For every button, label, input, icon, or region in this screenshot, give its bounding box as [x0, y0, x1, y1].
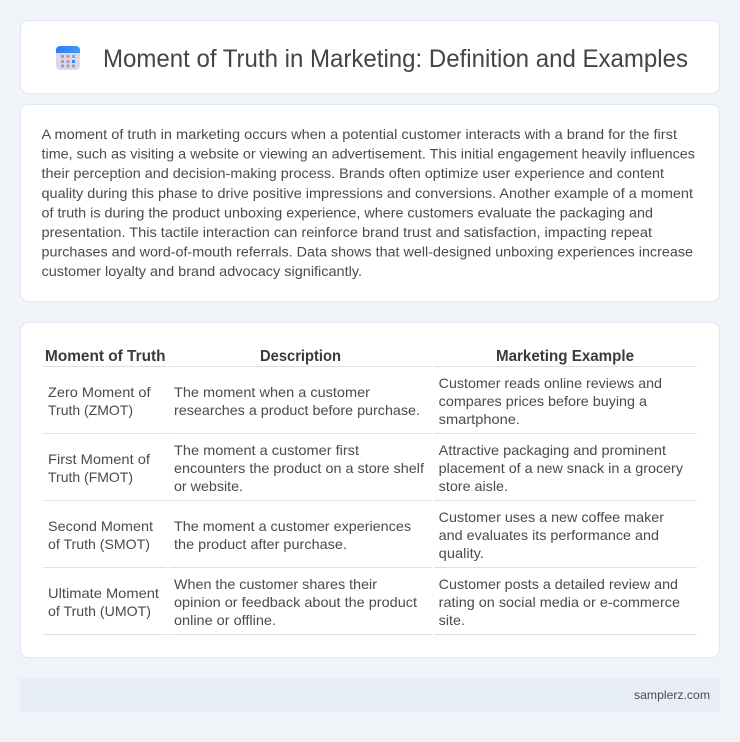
table row: ZMOT: Customer reads online reviews and — [439, 375, 662, 391]
table row: UMOT: online or offline. — [174, 612, 276, 628]
table row: FMOT: Attractive packaging and prominent — [439, 442, 666, 458]
table row: SMOT — [48, 509, 664, 561]
table header row — [45, 348, 634, 365]
table row: FMOT: Truth (FMOT) — [48, 469, 133, 485]
table header row: Description — [260, 348, 341, 365]
table row: FMOT — [48, 442, 683, 494]
table row: ZMOT: smartphone. — [439, 411, 520, 427]
text block: introduction paragraph: A moment of truth in marketing occurs when a potential customer interacts with a brand for the first — [42, 126, 677, 142]
table row: ZMOT — [48, 375, 662, 427]
table row: FMOT: First Moment of — [48, 451, 150, 467]
footer source text: samplerz.com — [634, 688, 710, 702]
table row: ZMOT: researches a product before purchase. — [174, 402, 420, 418]
table row: SMOT: and evaluates its performance and — [439, 527, 659, 543]
table row: SMOT: The moment a customer experiences — [174, 518, 411, 534]
panel: moments of truth table — [20, 322, 720, 658]
table row: SMOT: the product after purchase. — [174, 536, 347, 552]
table row: UMOT: When the customer shares their — [174, 576, 377, 592]
table row: ZMOT: Truth (ZMOT) — [48, 402, 133, 418]
text block: introduction paragraph: purchases and word-of-mouth referrals. Data shows that well-designed unboxing experiences increase — [42, 244, 693, 260]
table row: FMOT: The moment a customer first — [174, 442, 359, 458]
table row: ZMOT: The moment when a customer — [174, 384, 370, 400]
text block: introduction paragraph: quality during this phase to drive positive impressions and conversions. Another example of a moment — [42, 185, 693, 201]
text block: introduction paragraph — [42, 126, 695, 279]
table row: UMOT: Customer posts a detailed review and — [439, 576, 678, 592]
table row: FMOT: placement of a new snack in a grocery — [439, 460, 683, 476]
table row: ZMOT: Zero Moment of — [48, 384, 151, 400]
panel: introduction — [20, 104, 720, 302]
table row: FMOT: or website. — [174, 478, 243, 494]
table row: SMOT: Customer uses a new coffee maker — [439, 509, 664, 525]
table header row: Moment of Truth — [45, 348, 166, 365]
table row: UMOT: site. — [439, 612, 465, 628]
title: Moment of Truth in Marketing: Definition and Examples — [103, 45, 688, 73]
table row: FMOT: encounters the product on a store shelf — [174, 460, 424, 476]
text block: introduction paragraph: time, such as visiting a website or viewing an advertisement. This initial engagement heavily influences — [42, 146, 695, 162]
text block: introduction paragraph: customer loyalty and brand advocacy significantly. — [42, 263, 362, 279]
table row: UMOT — [48, 576, 680, 628]
text block: introduction paragraph: their perception and decision-making process. Brands often optimize user experience and content — [42, 165, 664, 181]
table row: ZMOT: compares prices before buying a — [439, 393, 647, 409]
footer bar — [20, 678, 720, 712]
text block: introduction paragraph: of truth is during the product unboxing experience, where customers evaluate the packaging and — [42, 204, 653, 220]
table row: SMOT: Second Moment — [48, 518, 153, 534]
table row: FMOT: store aisle. — [439, 478, 508, 494]
table row: SMOT: quality. — [439, 545, 484, 561]
table row: UMOT: rating on social media or e-commerce — [439, 594, 680, 610]
table row: UMOT: Ultimate Moment — [48, 585, 159, 601]
panel: title header — [20, 20, 720, 94]
table row: UMOT: of Truth (UMOT) — [48, 603, 151, 619]
table row: UMOT: opinion or feedback about the product — [174, 594, 417, 610]
icon: calendar — [56, 46, 80, 70]
table row: SMOT: of Truth (SMOT) — [48, 536, 150, 552]
text block: introduction paragraph: presentation. This tactile interaction can reinforce brand trust and satisfaction, impacting repeat — [42, 224, 652, 240]
table header row: Marketing Example — [496, 348, 634, 365]
